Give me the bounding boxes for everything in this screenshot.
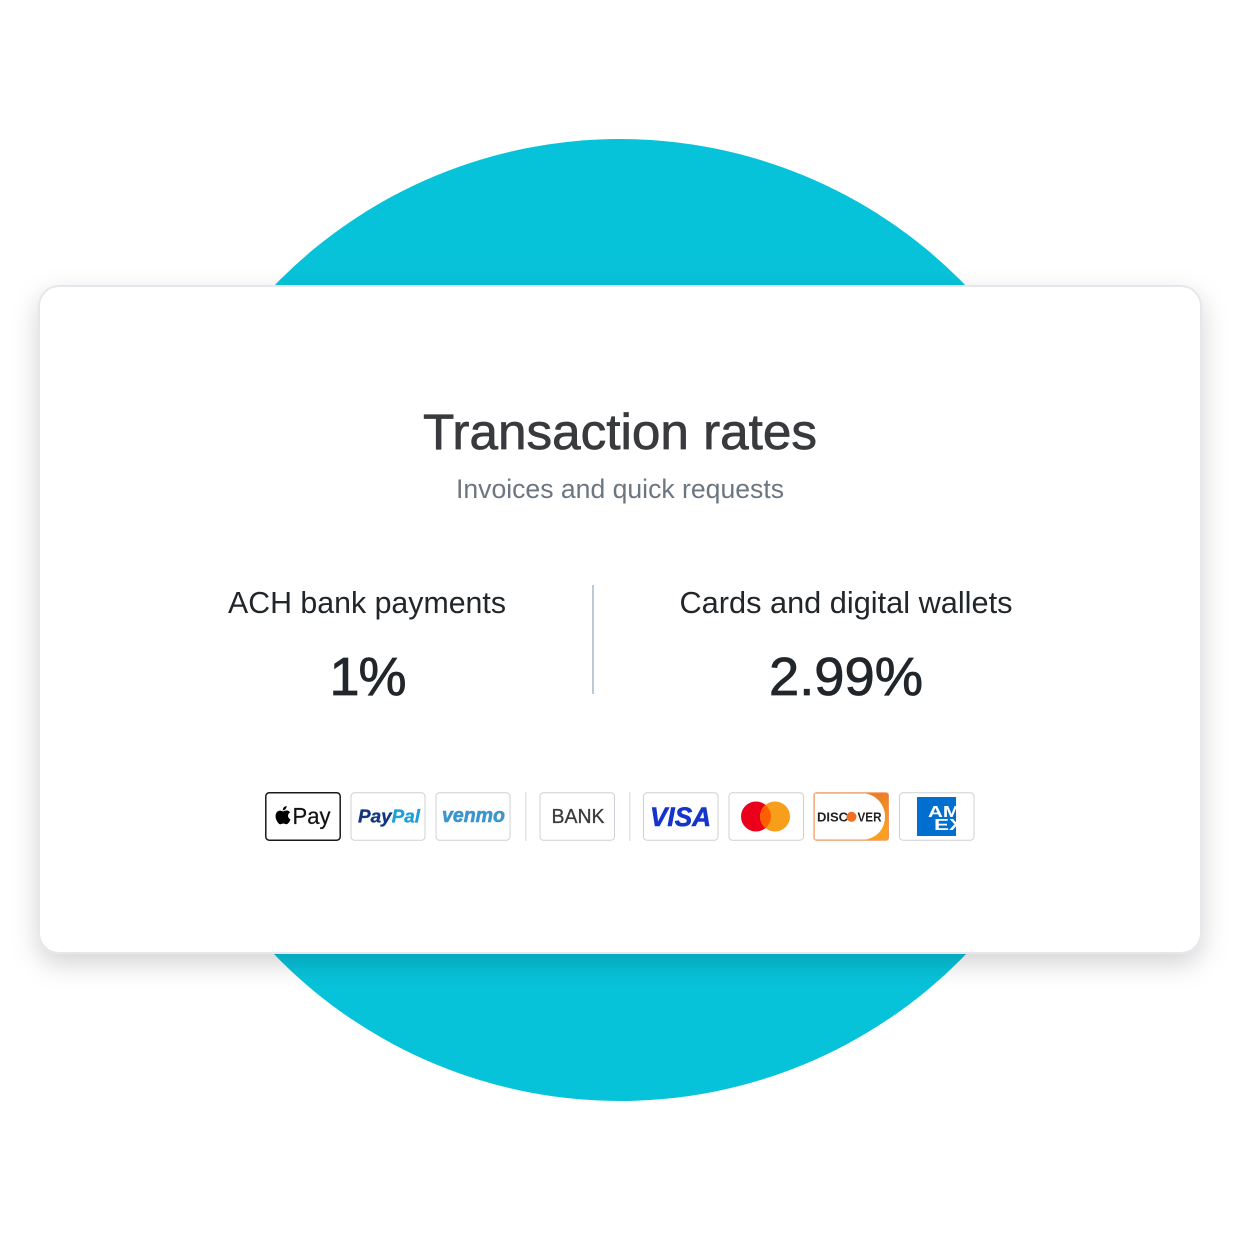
panel: main card [39, 286, 1201, 953]
icon: Mastercard [729, 793, 804, 840]
icon: American Express: AM [928, 804, 960, 821]
icon: Visa: VISA [650, 802, 711, 832]
subtitle: Invoices and quick requests [456, 474, 784, 504]
icon: Bank: BANK [552, 806, 605, 828]
separator [525, 792, 526, 841]
icon: American Express [900, 793, 974, 840]
title: Transaction rates [423, 404, 817, 460]
icon: PayPal: PayPal [358, 806, 421, 826]
icon: PayPal [351, 793, 425, 840]
icon: Apple Pay: Pay [292, 803, 331, 829]
icon: Visa [644, 793, 718, 840]
icon: American Express: EX [934, 817, 964, 834]
icon: Venmo [436, 793, 510, 840]
column divider [592, 585, 594, 694]
icon: Venmo: venmo [442, 805, 505, 827]
icon: Bank [540, 793, 614, 840]
cards rate: 2.99% [769, 647, 923, 707]
ACH label: ACH bank payments [228, 585, 506, 620]
cards label: Cards and digital wallets [680, 585, 1012, 620]
payment icons row [266, 792, 974, 841]
separator [629, 792, 630, 841]
icon: Discover: VER [858, 810, 882, 824]
ACH rate: 1% [330, 647, 406, 707]
icon: Apple Pay [266, 793, 340, 840]
icon: Discover: DISC [817, 810, 849, 824]
icon: Discover [814, 793, 888, 840]
teal background circle [139, 139, 1101, 1101]
